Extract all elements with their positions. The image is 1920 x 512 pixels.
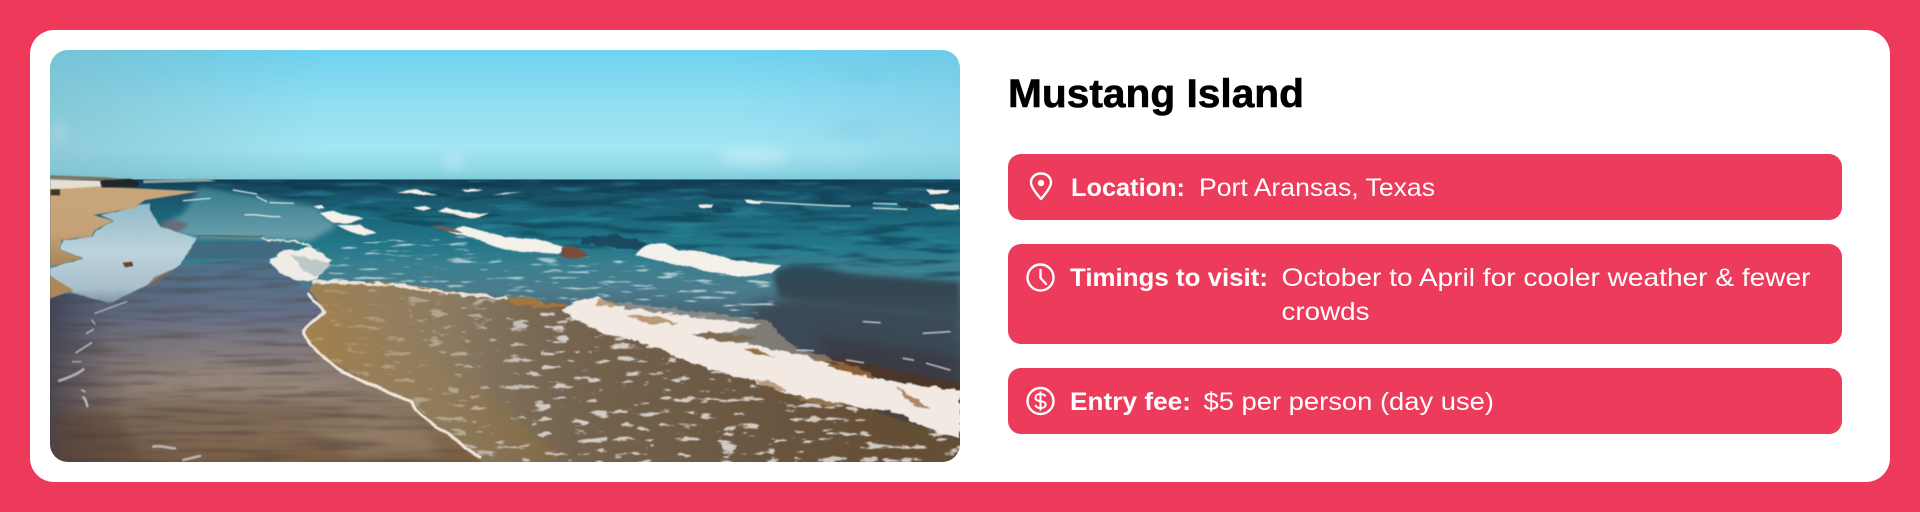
timings value: crowds [1282, 298, 1370, 326]
location value: Port Aransas, Texas [1199, 174, 1435, 202]
entry fee label: Entry fee: [1070, 388, 1191, 416]
icon: clock [1028, 264, 1054, 290]
heading: Mustang Island [1008, 72, 1304, 116]
row: entry fee [1008, 368, 1842, 434]
timings label: Timings to visit: [1070, 264, 1268, 292]
timings value: October to April for cooler weather & fewer [1282, 264, 1810, 292]
photo: Mustang Island beach and waves [50, 50, 963, 467]
icon: dollar coin [1028, 388, 1054, 414]
location label: Location: [1071, 174, 1185, 202]
entry fee value: $5 per person (day use) [1204, 388, 1494, 416]
row: location [1008, 154, 1842, 220]
row: timings to visit [1008, 244, 1842, 344]
icon: map pin [1031, 174, 1051, 199]
